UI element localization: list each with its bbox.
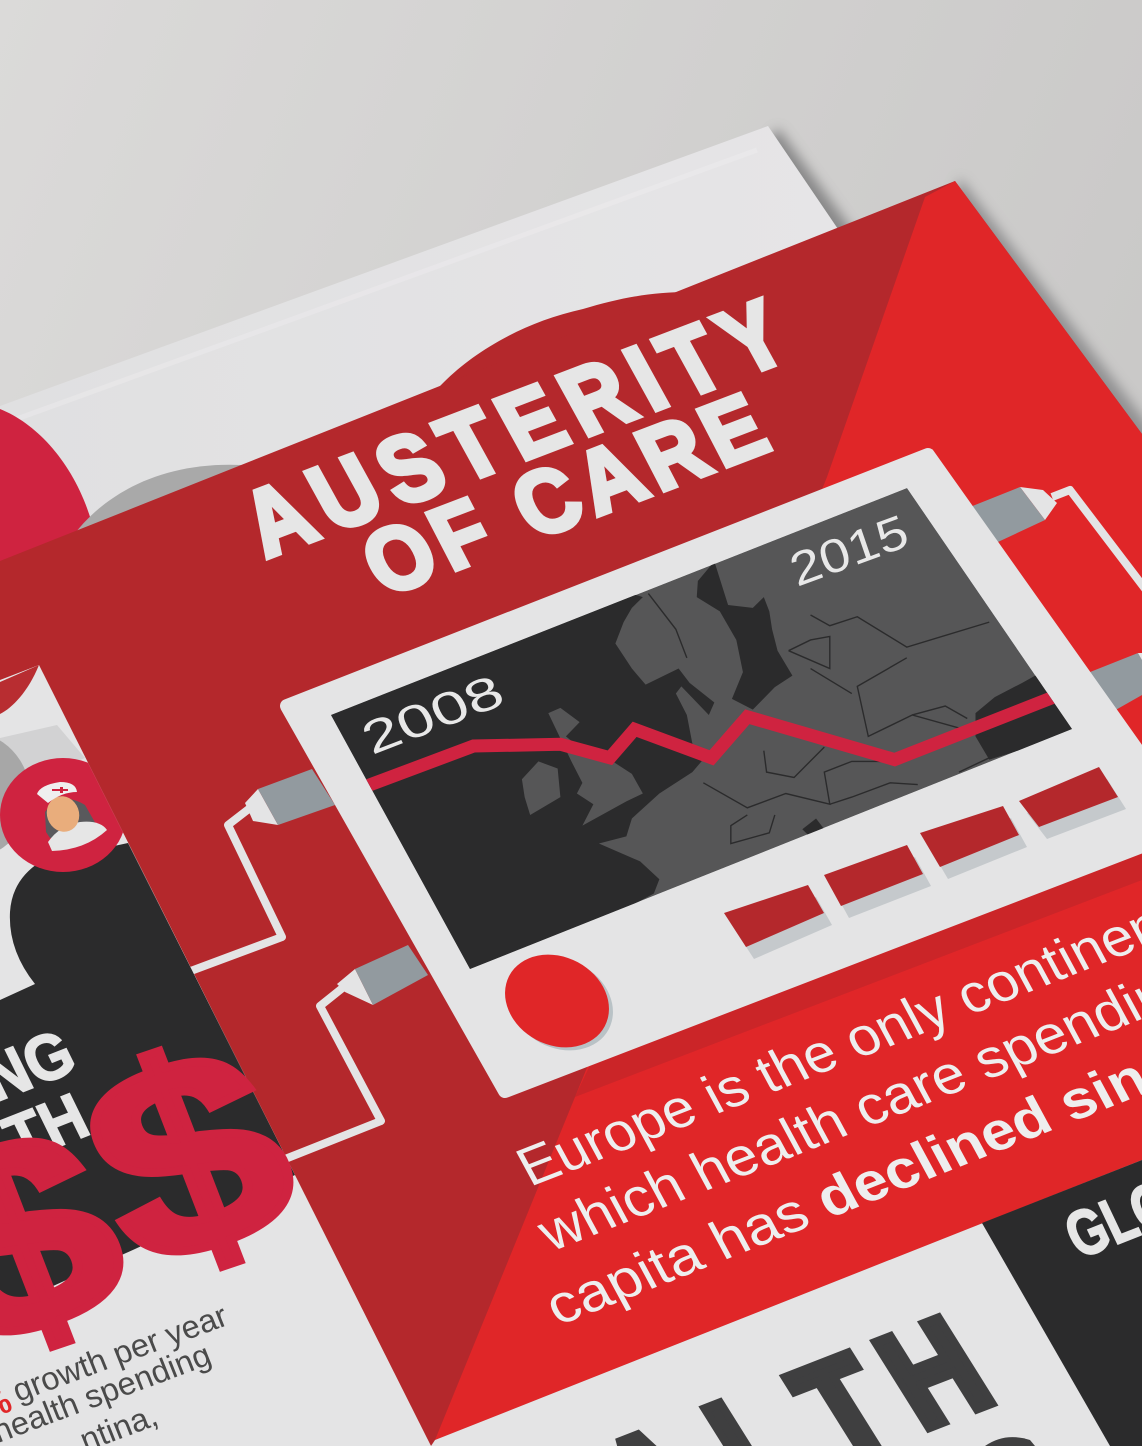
nozzle xyxy=(337,969,373,1005)
Ireland xyxy=(522,761,560,815)
dark lower panel xyxy=(982,1160,1142,1446)
bright red panel xyxy=(435,181,1142,1440)
plug xyxy=(355,945,428,1005)
cable: right upper xyxy=(960,487,1142,590)
body text: Europe statement xyxy=(506,893,1142,1337)
plug xyxy=(960,487,1045,548)
back sheet of paper xyxy=(0,126,858,600)
body text: growth per year: growth per year xyxy=(7,1297,233,1408)
gray circle on back sheet xyxy=(70,465,260,550)
red arc xyxy=(0,665,39,714)
line chart trace xyxy=(351,690,1072,792)
white lower panel xyxy=(431,1160,1142,1446)
dark block xyxy=(0,843,295,1310)
ocean xyxy=(331,595,714,969)
year label 2015: 2015 xyxy=(783,505,915,597)
gray band xyxy=(0,725,85,770)
body text: Europe statement: capita has declined sin xyxy=(534,1046,1142,1337)
dollar sign large: $ xyxy=(48,984,331,1329)
Adriatic xyxy=(802,819,824,835)
cable: left lower xyxy=(275,945,428,1163)
round button xyxy=(489,937,629,1068)
nozzle xyxy=(245,789,278,825)
icon: nurse portrait xyxy=(0,758,126,872)
year label 2008: 2008 xyxy=(353,665,512,765)
crimson circle on back sheet xyxy=(0,409,95,575)
panel: front left sheet xyxy=(0,665,431,1446)
Black Sea xyxy=(976,676,1072,760)
plug: right lower xyxy=(1075,653,1142,716)
title: AUSTERITY xyxy=(224,277,815,577)
red circle on back sheet xyxy=(428,292,700,405)
shadow wedge under monitor xyxy=(575,849,1142,1097)
title: OF CARE xyxy=(346,373,790,615)
control buttons xyxy=(724,767,1126,959)
panel: monitor xyxy=(280,455,1142,1091)
nozzle xyxy=(1020,487,1057,520)
gray circle xyxy=(0,740,25,850)
borders xyxy=(648,594,989,844)
Baltic sea xyxy=(697,561,792,710)
shadow of main sheet xyxy=(950,178,1142,480)
plug xyxy=(258,769,335,825)
Great Britain xyxy=(548,708,643,826)
screen with map of Europe xyxy=(331,488,1072,969)
heading fragment ALTH xyxy=(574,1288,1035,1446)
cable: left upper xyxy=(180,769,335,975)
